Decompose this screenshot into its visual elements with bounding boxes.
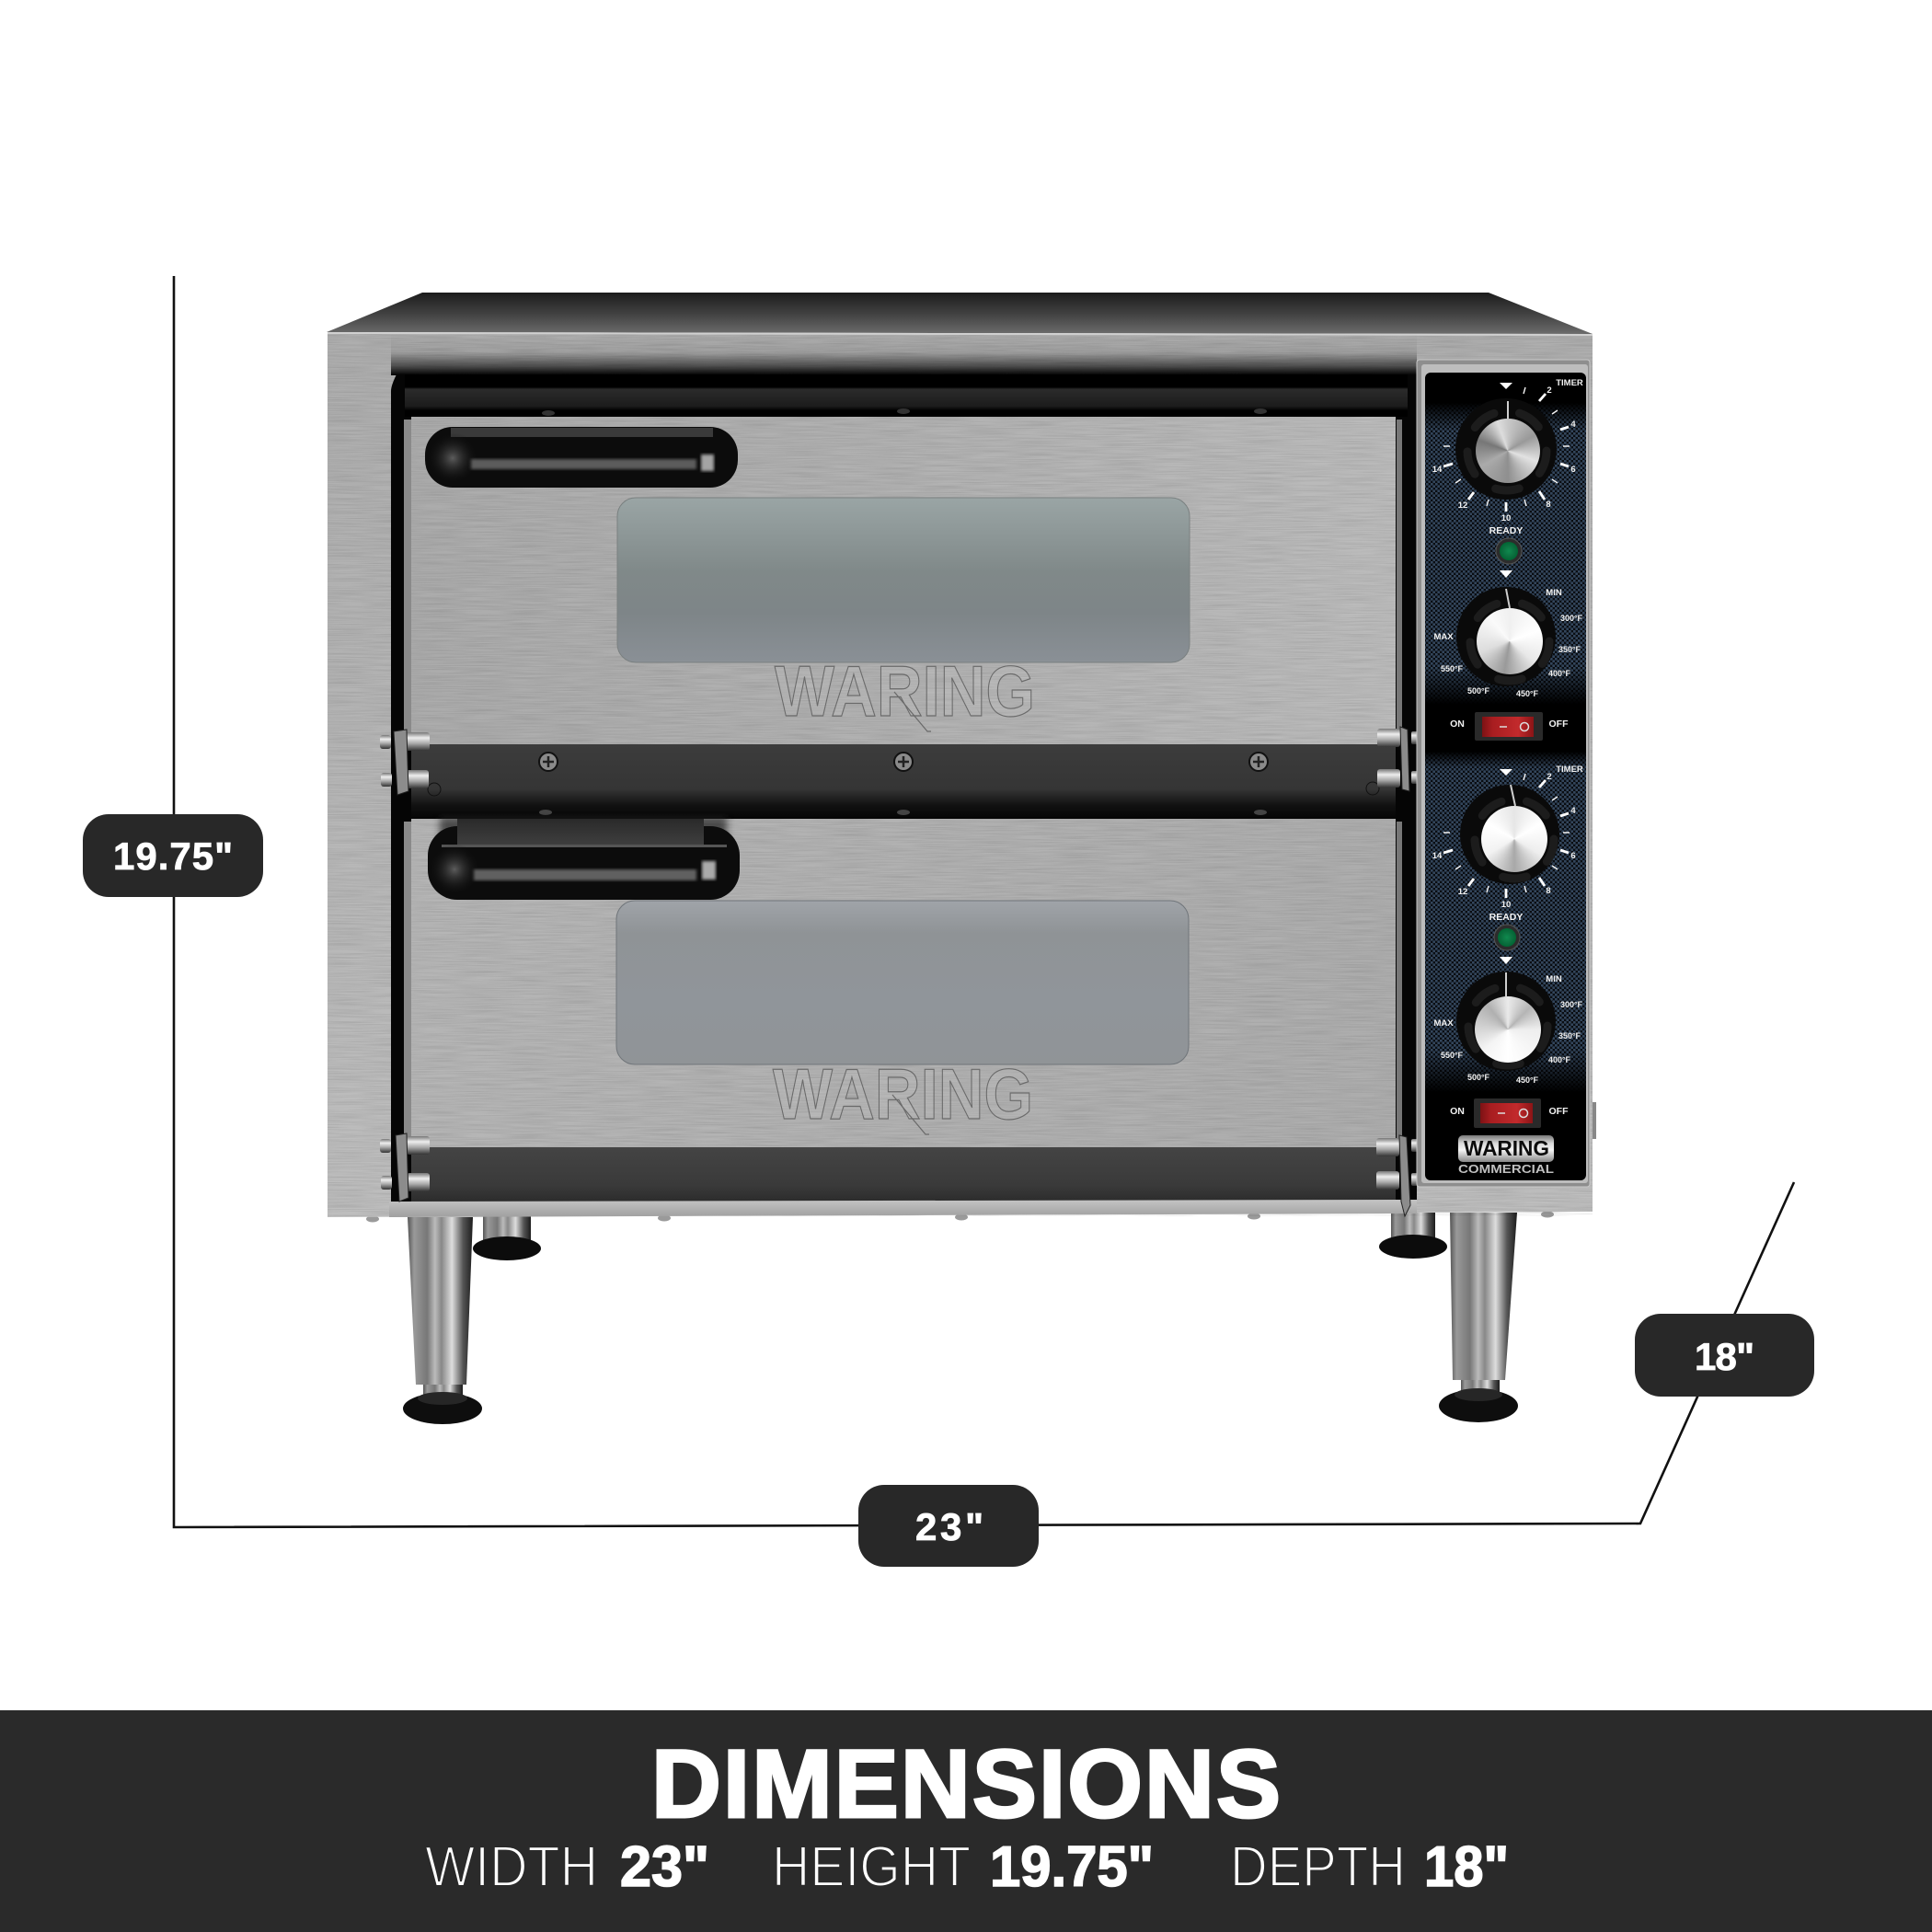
upper power switch: ON xyxy=(1450,719,1465,730)
carbon pattern bottom xyxy=(1425,752,1586,1092)
body brushed texture xyxy=(328,333,1593,1216)
upper temperature knob xyxy=(1456,587,1556,686)
depth spec xyxy=(1230,1835,1509,1899)
upper timer labels: 8 xyxy=(1546,500,1551,510)
lower temperature labels: 300°F xyxy=(1560,1000,1583,1009)
lower timer labels: 4 xyxy=(1570,806,1576,816)
timer dial ticks lower xyxy=(1443,769,1570,964)
width badge: 23" xyxy=(915,1505,983,1548)
waring commercial logo: COMMERCIAL xyxy=(1458,1162,1554,1176)
upper door handle xyxy=(425,427,738,488)
lower timer labels xyxy=(1432,765,1583,923)
lower temperature labels: 500°F xyxy=(1467,1073,1490,1082)
lower temperature knob xyxy=(1456,972,1556,1071)
waring commercial logo: WARING xyxy=(1464,1136,1549,1160)
dimension guide lines xyxy=(174,276,1794,1527)
frame top lip xyxy=(405,374,1408,417)
bottom metal strip xyxy=(389,1200,1417,1217)
top edge highlight xyxy=(328,333,1593,335)
carbon pattern top xyxy=(1425,403,1586,704)
right side sliver xyxy=(1397,420,1402,742)
height badge: 19.75" xyxy=(113,834,233,878)
lower door window xyxy=(616,901,1189,1064)
lower door panel xyxy=(404,817,1402,1147)
lower black bar xyxy=(411,1147,1396,1202)
front right leg xyxy=(1439,1213,1518,1422)
right upper hinge xyxy=(1366,727,1425,795)
upper timer labels: 6 xyxy=(1570,465,1576,475)
upper temperature labels: MIN xyxy=(1546,588,1562,598)
lower power switch: ON xyxy=(1450,1106,1465,1117)
upper timer labels: 12 xyxy=(1458,500,1467,511)
back feet xyxy=(473,1213,1447,1260)
waring commercial logo xyxy=(1458,1135,1554,1176)
upper power switch: OFF xyxy=(1549,719,1569,730)
lower timer labels: TIMER xyxy=(1556,765,1583,775)
upper timer labels: 10 xyxy=(1501,513,1511,523)
timer dial ticks upper xyxy=(1443,383,1570,578)
width spec: WIDTH xyxy=(425,1835,598,1899)
footer banner xyxy=(0,1710,1932,1932)
upper temperature labels xyxy=(1433,588,1583,698)
left upper hinge xyxy=(380,730,441,796)
left lower hinge xyxy=(380,1133,430,1202)
upper ready light xyxy=(1496,538,1522,564)
lower temperature labels: MIN xyxy=(1546,974,1562,984)
upper timer labels: READY xyxy=(1489,525,1523,536)
lower temperature labels xyxy=(1433,974,1583,1085)
lower temperature labels: 400°F xyxy=(1548,1055,1571,1064)
metal body front xyxy=(328,333,1593,1217)
upper door brushed texture xyxy=(411,417,1396,744)
height spec: HEIGHT xyxy=(772,1835,971,1899)
lower power switch: OFF xyxy=(1549,1106,1569,1117)
oven xyxy=(327,293,1596,1424)
upper temperature labels: 400°F xyxy=(1548,669,1571,678)
left side sliver xyxy=(404,420,411,742)
side tab xyxy=(1593,1102,1596,1139)
black door frame xyxy=(391,374,1417,1202)
front left leg xyxy=(403,1217,482,1424)
upper timer labels xyxy=(1432,378,1583,536)
lower temperature labels: 550°F xyxy=(1441,1051,1464,1060)
upper temperature labels: 350°F xyxy=(1558,645,1581,654)
upper temperature labels: 500°F xyxy=(1467,686,1490,696)
underside rivets xyxy=(366,1211,1554,1222)
lower timer labels: 10 xyxy=(1501,900,1511,910)
width badge xyxy=(858,1485,1039,1567)
upper temperature labels: 450°F xyxy=(1516,689,1539,698)
upper timer labels: 4 xyxy=(1570,420,1576,430)
lower ready light xyxy=(1494,925,1520,950)
lower temperature labels: 350°F xyxy=(1558,1031,1581,1041)
upper temperature labels: 300°F xyxy=(1560,614,1583,623)
depth spec: 18" xyxy=(1424,1835,1509,1899)
embossed logo upper: WARING xyxy=(775,650,1035,731)
upper timer labels: 14 xyxy=(1432,465,1443,475)
upper temperature labels: 550°F xyxy=(1441,664,1464,673)
control panel bezel xyxy=(1417,360,1590,1187)
lower temperature labels: MAX xyxy=(1433,1018,1454,1029)
depth spec: DEPTH xyxy=(1230,1835,1406,1899)
lower timer knob xyxy=(1460,785,1559,884)
width spec: 23" xyxy=(620,1835,709,1899)
depth badge: 18" xyxy=(1695,1335,1754,1378)
lower door handle xyxy=(428,817,740,900)
upper timer knob xyxy=(1455,398,1557,500)
bar screws xyxy=(539,408,1268,815)
right lower hinge xyxy=(1376,1135,1425,1216)
embossed logo lower: WARING xyxy=(773,1053,1033,1134)
pattern fades xyxy=(1425,403,1586,1092)
lower timer labels: 12 xyxy=(1458,887,1467,897)
shadow above door frame xyxy=(391,333,1417,375)
lower timer labels: 14 xyxy=(1432,851,1443,861)
lower timer labels: 2 xyxy=(1547,772,1552,782)
upper door window xyxy=(617,498,1190,662)
lower power switch xyxy=(1450,1098,1569,1128)
height badge xyxy=(83,814,263,897)
lower timer labels: 6 xyxy=(1570,851,1576,861)
lower door brushed texture xyxy=(411,819,1396,1147)
title: DIMENSIONS xyxy=(651,1731,1281,1838)
top surface xyxy=(327,293,1593,334)
control panel face xyxy=(1425,373,1586,1180)
depth badge xyxy=(1635,1314,1814,1397)
height spec: 19.75" xyxy=(990,1835,1154,1899)
width spec xyxy=(425,1835,709,1899)
lower temperature labels: 450°F xyxy=(1516,1075,1539,1085)
upper temperature labels: MAX xyxy=(1433,632,1454,642)
upper timer labels: TIMER xyxy=(1556,378,1583,388)
upper door panel xyxy=(411,417,1396,744)
lower timer labels: READY xyxy=(1489,912,1523,923)
height spec xyxy=(772,1835,1154,1899)
lower timer labels: 8 xyxy=(1546,886,1551,896)
upper timer labels: 2 xyxy=(1547,385,1552,396)
upper power switch xyxy=(1450,712,1569,741)
middle black bar xyxy=(411,408,1396,819)
